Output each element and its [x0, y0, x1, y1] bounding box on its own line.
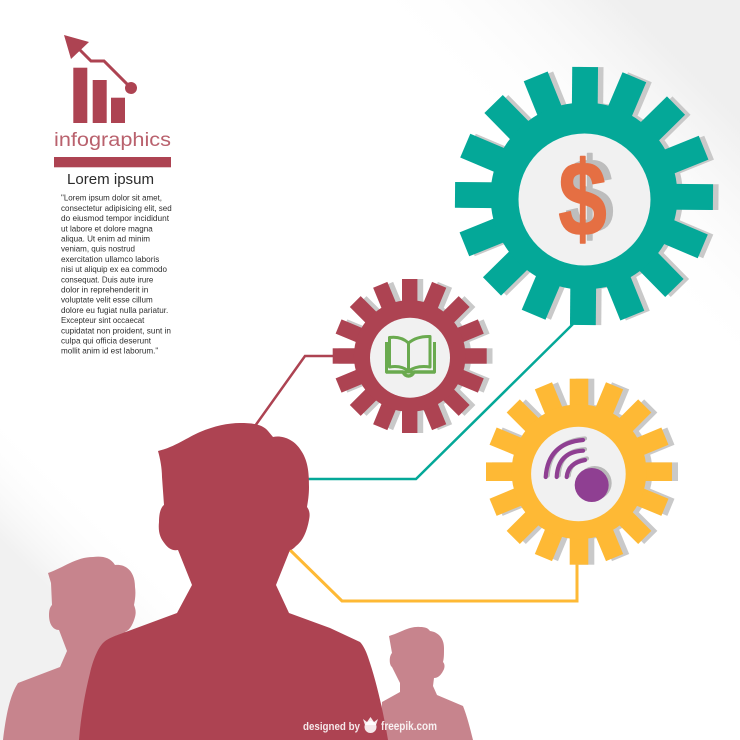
- heading: infographics: infographics: [54, 129, 171, 151]
- text block: body paragraph: mollit anim id est laborum.": [61, 346, 158, 356]
- text block: body paragraph: consectetur adipisicing elit, sed: [61, 203, 172, 213]
- text block: body paragraph: exercitation ullamco laboris: [61, 254, 159, 264]
- connector: head to red gear: [255, 356, 336, 426]
- text block: body paragraph: do eiusmod tempor incididunt: [61, 213, 170, 223]
- icon: freepik crown: [363, 717, 378, 733]
- icon: open book: [386, 336, 435, 376]
- panel: teal gear with dollar icon: [454, 66, 720, 326]
- panel: yellow gear with signal icon: [486, 379, 678, 565]
- connector: head to yellow gear: [289, 549, 577, 601]
- icon: signal waves and dot: [546, 438, 612, 502]
- connector: head to teal gear: [306, 324, 573, 479]
- silhouette: main person: [79, 423, 388, 740]
- icon: bar chart logo with arrow: [64, 35, 137, 123]
- text block: body paragraph: ut labore et dolore magna: [61, 223, 153, 233]
- text block: body paragraph: nisi ut aliquip ex ea commodo: [61, 264, 167, 274]
- icon: dollar sign: $: [558, 139, 607, 258]
- footer: freepik credit: freepik.com: [381, 719, 437, 733]
- text block: body paragraph: "Lorem ipsum dolor sit amet,: [61, 193, 162, 203]
- silhouette: back left person: [3, 557, 200, 740]
- subheading: Lorem ipsum: Lorem ipsum: [67, 171, 154, 188]
- text block: body paragraph: culpa qui officia deserunt: [61, 336, 152, 346]
- icon: dollar sign: $: [565, 136, 614, 255]
- text block: body paragraph: [61, 193, 172, 356]
- text block: body paragraph: dolor in reprehenderit in: [61, 284, 148, 294]
- text block: body paragraph: aliqua. Ut enim ad minim: [61, 234, 150, 244]
- footer: freepik credit: designed by: [303, 721, 361, 733]
- heading underline bar: [54, 157, 171, 167]
- text block: body paragraph: dolore eu fugiat nulla pariatur.: [61, 305, 168, 315]
- text block: body paragraph: veniam, quis nostrud: [61, 244, 135, 254]
- panel: red gear with book icon: [333, 279, 492, 433]
- text block: body paragraph: cupidatat non proident, sunt in: [61, 325, 171, 335]
- footer: freepik credit: [303, 717, 437, 733]
- text block: body paragraph: Excepteur sint occaecat: [61, 315, 145, 325]
- silhouette: back right person: [380, 627, 473, 740]
- text block: body paragraph: voluptate velit esse cillum: [61, 295, 153, 305]
- text block: body paragraph: consequat. Duis aute irure: [61, 274, 153, 284]
